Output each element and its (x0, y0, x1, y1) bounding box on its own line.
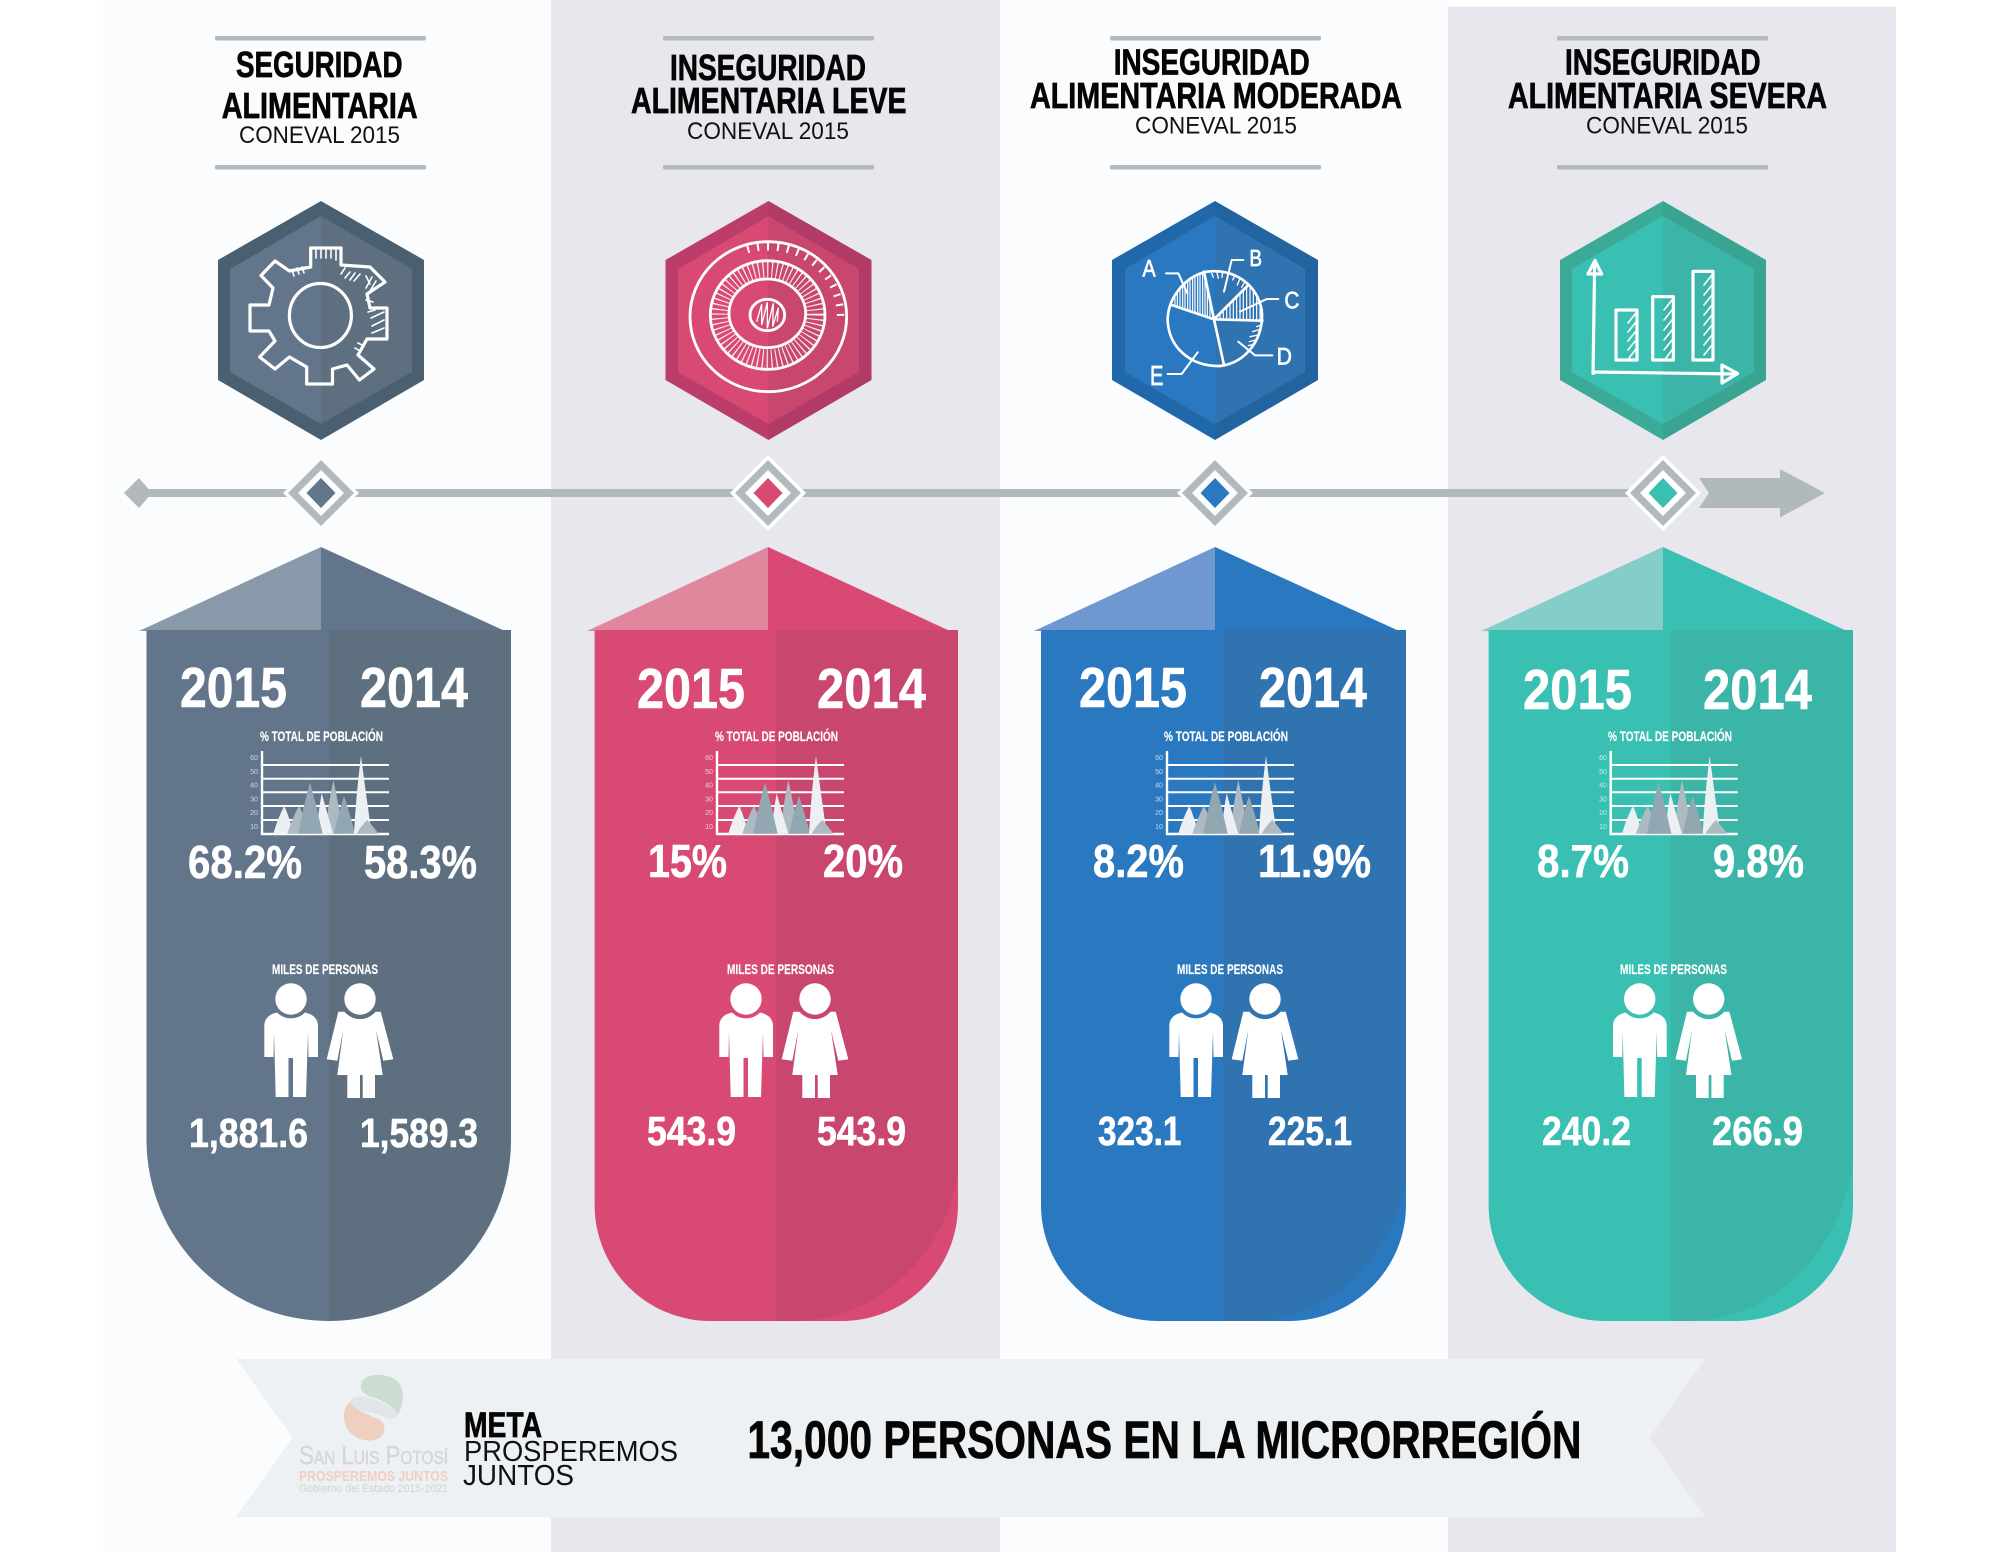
people block: MILES DE PERSONAS (1620, 961, 1727, 977)
percent values: 68.2% (188, 836, 302, 888)
marker: column 3 (1177, 456, 1253, 530)
chart: total population: 40 (705, 782, 713, 790)
people values: 240.2 (1542, 1108, 1631, 1154)
heading: inseguridad alimentaria severa: ALIMENTARIA SEVERA (1508, 75, 1827, 116)
percent values: 8.2% (1093, 835, 1184, 887)
chart: total population: 50 (705, 769, 713, 776)
percent values: 11.9% (1258, 835, 1371, 887)
heading: seguridad alimentaria: CONEVAL 2015 (239, 122, 400, 149)
year labels: 2015 (1523, 658, 1632, 722)
people block: MILES DE PERSONAS (1177, 961, 1283, 977)
chart: total population: 10 (1155, 824, 1163, 831)
chart: total population: 20 (1155, 810, 1163, 817)
panel: inseguridad severa shield (1481, 547, 1853, 1321)
chart: total population: 20 (1599, 810, 1607, 817)
heading: inseguridad alimentaria leve (631, 36, 906, 170)
heading: inseguridad alimentaria moderada (1030, 36, 1402, 170)
chart: total population: 60 (1599, 755, 1607, 762)
people block (719, 961, 848, 1098)
chart: total population: 50 (250, 769, 258, 776)
percent values: 15% (648, 835, 727, 887)
year labels: 2015 (180, 656, 287, 720)
people values (189, 1110, 478, 1156)
chart: total population: 10 (250, 824, 258, 831)
percent values (188, 836, 477, 888)
year labels: 2014 (1703, 658, 1812, 722)
panel: inseguridad leve shield (587, 547, 958, 1321)
icon: pie chart hexagon: E (1150, 360, 1163, 391)
year labels: 2014 (1259, 656, 1367, 720)
text: meta prosperemos juntos: JUNTOS (463, 1460, 574, 1492)
heading: inseguridad alimentaria moderada: INSEGURIDAD (1114, 41, 1310, 82)
people values (647, 1108, 906, 1154)
year labels: 2014 (817, 657, 926, 721)
chart: total population: 40 (250, 782, 258, 790)
heading: inseguridad alimentaria leve: INSEGURIDAD (670, 47, 866, 88)
chart: total population: 40 (1599, 782, 1607, 790)
logo: San Luis Potosí: PROSPEREMOS JUNTOS (299, 1468, 448, 1485)
icon: pie chart hexagon: D (1277, 343, 1292, 370)
logo: San Luis Potosí: Gobierno del Estado 2015-2021 (299, 1483, 448, 1495)
chart: total population (250, 727, 389, 835)
chart: total population: 60 (705, 755, 713, 762)
chart: total population: 30 (705, 796, 713, 804)
people block (264, 961, 393, 1098)
panel: seguridad alimentaria shield (139, 547, 511, 1321)
people values: 1,881.6 (189, 1110, 308, 1156)
arrow head (1699, 469, 1825, 518)
chart: total population: % TOTAL DE POBLACIÓN (715, 727, 838, 744)
heading: seguridad alimentaria: SEGURIDAD (236, 44, 402, 85)
chart: total population: 30 (1155, 796, 1163, 804)
icon: bar chart hexagon (1560, 201, 1766, 440)
people values: 225.1 (1268, 1108, 1352, 1154)
percent values: 58.3% (364, 836, 477, 888)
chart: total population (705, 727, 844, 835)
people values: 543.9 (817, 1108, 906, 1154)
chart: total population: % TOTAL DE POBLACIÓN (1608, 727, 1732, 744)
chart: total population (1155, 727, 1294, 835)
text: meta prosperemos juntos (463, 1405, 678, 1492)
people values: 323.1 (1098, 1108, 1181, 1154)
heading: inseguridad alimentaria leve: ALIMENTARIA LEVE (631, 80, 906, 121)
heading: seguridad alimentaria (215, 36, 426, 170)
heading: inseguridad alimentaria severa (1508, 36, 1827, 170)
chart: total population: 10 (1599, 824, 1607, 831)
icon: pie chart hexagon: A (1142, 256, 1156, 283)
heading: inseguridad alimentaria moderada: CONEVAL 2015 (1135, 112, 1297, 140)
year labels (1079, 656, 1367, 720)
panel: inseguridad moderada shield (1034, 547, 1406, 1321)
banner: goal (236, 1359, 1705, 1517)
people block: MILES DE PERSONAS (727, 961, 834, 977)
heading: inseguridad alimentaria severa: CONEVAL 2015 (1586, 112, 1748, 140)
people block (1613, 961, 1742, 1098)
timeline with arrow (124, 455, 1825, 531)
icon: pie chart hexagon (1112, 201, 1318, 440)
heading: inseguridad alimentaria moderada: ALIMENTARIA MODERADA (1030, 75, 1402, 116)
chart: total population: 30 (1599, 796, 1607, 804)
chart: total population: 20 (250, 810, 258, 817)
text: 13,000 personas: 13,000 PERSONAS EN LA MICRORREGIÓN (747, 1410, 1581, 1470)
marker: column 1 (283, 456, 359, 530)
timeline start marker (124, 478, 152, 508)
icon: gear hexagon (218, 201, 424, 440)
year labels: 2014 (360, 656, 468, 720)
chart: total population: 30 (250, 796, 258, 804)
chart: total population: % TOTAL DE POBLACIÓN (1164, 727, 1288, 744)
text: meta prosperemos juntos: META (464, 1405, 542, 1445)
year labels (637, 657, 926, 721)
marker: column 4 (1625, 455, 1701, 531)
chart: total population: 40 (1155, 782, 1163, 790)
year labels (1523, 658, 1812, 722)
percent values: 8.7% (1537, 835, 1629, 887)
people values (1542, 1108, 1803, 1154)
marker: column 2 (730, 455, 806, 531)
percent values: 9.8% (1713, 835, 1804, 887)
chart: total population: 50 (1599, 769, 1607, 776)
percent values (648, 835, 903, 887)
chart: total population (1599, 727, 1738, 835)
people values (1098, 1108, 1352, 1154)
chart: total population: % TOTAL DE POBLACIÓN (260, 727, 383, 744)
year labels: 2015 (637, 657, 745, 721)
people block (1169, 961, 1298, 1098)
icon: target hexagon (666, 201, 872, 440)
people block: MILES DE PERSONAS (272, 961, 378, 977)
heading: seguridad alimentaria: ALIMENTARIA (222, 85, 418, 126)
people values: 1,589.3 (360, 1110, 478, 1156)
percent values (1537, 835, 1804, 887)
heading: inseguridad alimentaria severa: INSEGURIDAD (1565, 41, 1761, 82)
chart: total population: 60 (1155, 755, 1163, 762)
year labels (180, 656, 468, 720)
logo: San Luis Potosí: San Luis Potosí (299, 1440, 448, 1470)
chart: total population: 50 (1155, 769, 1163, 776)
chart: total population: 20 (705, 810, 713, 817)
heading: inseguridad alimentaria leve: CONEVAL 2015 (687, 118, 849, 145)
percent values (1093, 835, 1371, 887)
icon: pie chart hexagon: C (1284, 287, 1299, 314)
chart: total population: 60 (250, 755, 258, 762)
icon: pie chart hexagon: B (1249, 245, 1262, 271)
people values: 543.9 (647, 1108, 736, 1154)
text: meta prosperemos juntos: PROSPEREMOS (464, 1436, 678, 1468)
year labels: 2015 (1079, 656, 1187, 720)
logo: San Luis Potosí (299, 1375, 448, 1495)
chart: total population: 10 (705, 824, 713, 831)
percent values: 20% (823, 835, 903, 887)
people values: 266.9 (1712, 1108, 1803, 1154)
